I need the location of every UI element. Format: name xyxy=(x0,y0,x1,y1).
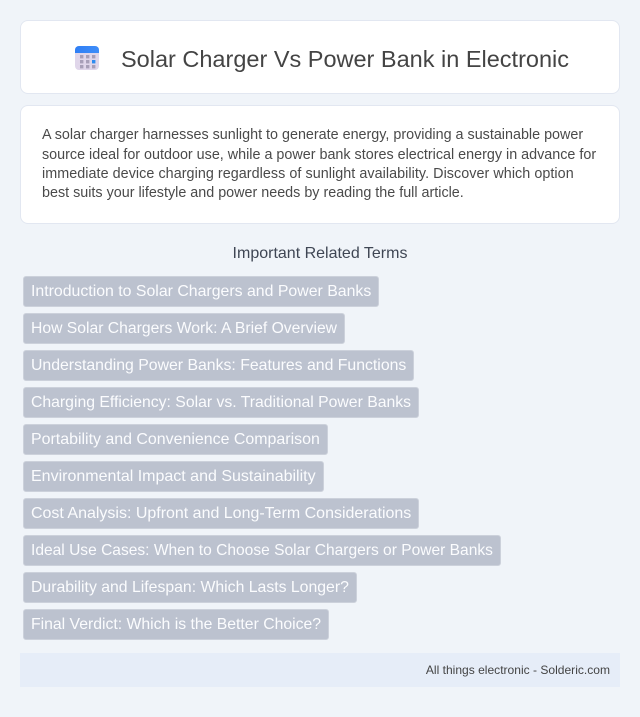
intro paragraph: immediate device charging regardless of sunlight availability. Discover which option xyxy=(42,166,574,182)
header card xyxy=(20,20,620,94)
tag 1 xyxy=(23,276,379,307)
tag 7 xyxy=(23,498,419,529)
tag 3 xyxy=(23,350,414,381)
intro text panel xyxy=(20,105,620,224)
tag 6: Environmental Impact and Sustainability xyxy=(31,468,316,485)
section heading: Important Related Terms xyxy=(233,245,407,262)
tag 1: Introduction to Solar Chargers and Power Banks xyxy=(31,283,371,300)
tag 4: Charging Efficiency: Solar vs. Traditional Power Banks xyxy=(31,394,411,411)
tag 3: Understanding Power Banks: Features and Functions xyxy=(31,357,406,374)
intro paragraph: best suits your lifestyle and power needs by reading the full article. xyxy=(42,185,464,201)
intro paragraph: A solar charger harnesses sunlight to generate energy, providing a sustainable power xyxy=(42,127,583,143)
tag 5 xyxy=(23,424,328,455)
tag 2: How Solar Chargers Work: A Brief Overview xyxy=(31,320,337,337)
footer bar xyxy=(20,653,620,687)
tag 9 xyxy=(23,572,357,603)
tag list xyxy=(23,276,501,640)
icon: calendar xyxy=(75,46,99,70)
footer credit: All things electronic - Solderic.com xyxy=(426,663,610,677)
tag 6 xyxy=(23,461,324,492)
title: Solar Charger Vs Power Bank in Electronic xyxy=(121,46,569,72)
tag 10: Final Verdict: Which is the Better Choice? xyxy=(31,616,321,633)
tag 10 xyxy=(23,609,329,640)
intro paragraph: source ideal for outdoor use, while a power bank stores electrical energy in advance for xyxy=(42,147,596,163)
intro paragraph xyxy=(42,127,596,201)
tag 4 xyxy=(23,387,419,418)
tag 9: Durability and Lifespan: Which Lasts Longer? xyxy=(31,579,349,596)
tag 8: Ideal Use Cases: When to Choose Solar Chargers or Power Banks xyxy=(31,542,493,559)
tag 7: Cost Analysis: Upfront and Long-Term Considerations xyxy=(31,505,411,522)
tag 5: Portability and Convenience Comparison xyxy=(31,431,320,448)
tag 2 xyxy=(23,313,345,344)
tag 8 xyxy=(23,535,501,566)
